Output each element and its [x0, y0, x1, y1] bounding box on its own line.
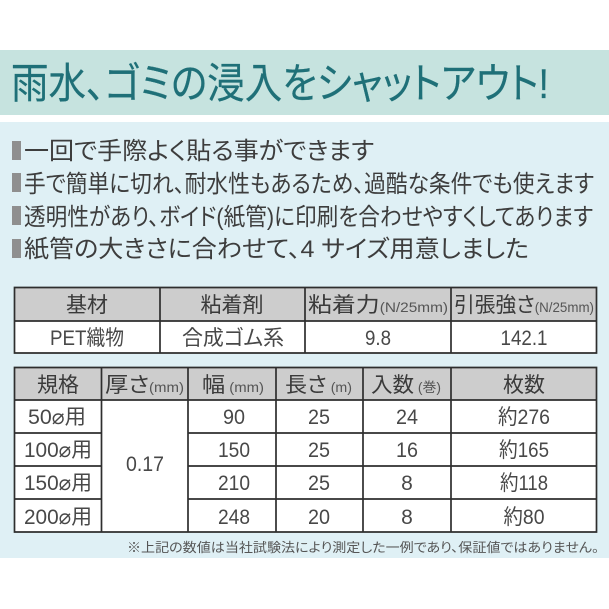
material properties table: 9.8 — [365, 327, 391, 350]
size specification table: 長さ (m) — [285, 374, 352, 397]
material properties table: PET織物 — [50, 327, 124, 350]
material properties table: 引張強さ(N/25mm) — [454, 294, 594, 317]
material properties table: 142.1 — [500, 327, 548, 350]
footnote: ※上記の数値は当社試験法により測定した一例であり、保証値ではありません。 — [127, 540, 599, 555]
size specification table: 210 — [218, 472, 250, 495]
size specification table: 8 — [401, 506, 413, 529]
size specification table: 25 — [308, 439, 330, 462]
size specification table: 約165 — [499, 439, 549, 462]
size specification table: 約80 — [504, 506, 544, 529]
size specification table: 248 — [218, 506, 250, 529]
size specification table: 約118 — [500, 472, 548, 495]
size specification table: 25 — [308, 472, 330, 495]
feature list: 紙管の大きさに合わせて、4 サイズ用意しました — [24, 236, 529, 263]
feature list: 一回で手際よく貼る事ができます — [24, 138, 374, 165]
size specification table: 16 — [396, 439, 418, 462]
size specification table: 約276 — [498, 406, 550, 429]
size specification table: 入数 (巻) — [371, 374, 441, 397]
size specification table: 24 — [396, 406, 418, 429]
size specification table: 8 — [401, 472, 413, 495]
size specification table: 25 — [308, 406, 330, 429]
material properties table: 合成ゴム系 — [182, 327, 284, 350]
size specification table: 厚さ (mm) — [105, 374, 184, 397]
size specification table: 150⌀用 — [24, 472, 92, 495]
size specification table: 20 — [308, 506, 330, 529]
size specification table: 枚数 — [503, 374, 545, 397]
size specification table: 0.17 — [126, 453, 164, 476]
size specification table: 50⌀用 — [28, 406, 86, 429]
material properties table: 粘着剤 — [200, 294, 264, 317]
size specification table: 規格 — [37, 374, 79, 397]
material properties table: 基材 — [66, 294, 108, 317]
size specification table — [14, 368, 596, 532]
size specification table: 幅 (mm) — [202, 374, 264, 397]
size specification table: 90 — [223, 406, 245, 429]
material properties table: 粘着力 (N/25mm) — [308, 294, 448, 317]
feature list — [12, 138, 594, 263]
size specification table: 150 — [218, 439, 250, 462]
title banner: 雨水、ゴミの浸入をシャットアウト! — [11, 60, 549, 107]
size specification table: 200⌀用 — [24, 506, 92, 529]
material properties table — [14, 288, 596, 354]
panel: features and specifications — [0, 122, 609, 558]
size specification table: 100⌀用 — [24, 439, 92, 462]
